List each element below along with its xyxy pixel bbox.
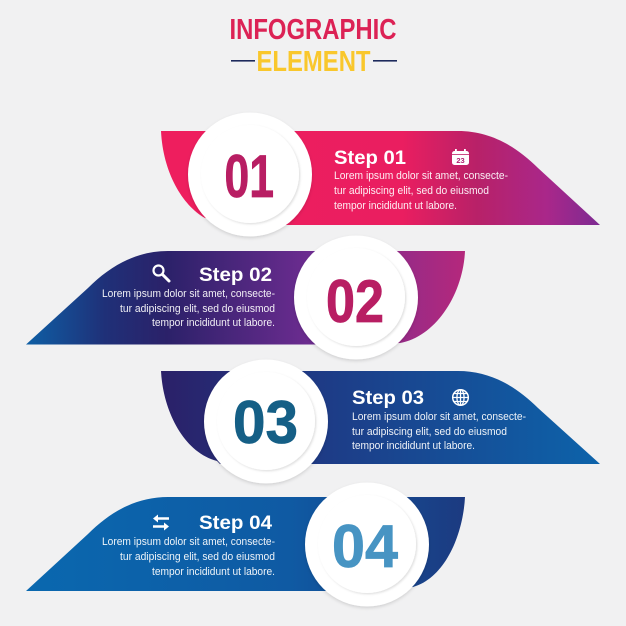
number circle 01	[188, 112, 312, 236]
number circle 04	[305, 482, 429, 606]
step 03 body text: tur adipiscing elit, sed do eiusmod	[352, 426, 507, 438]
step 03 body text: Lorem ipsum dolor sit amet, consecte-	[352, 411, 526, 423]
number circle 03: 03	[233, 389, 298, 456]
step 01 heading: Step 01	[334, 148, 406, 169]
band 03	[161, 371, 600, 464]
step 04 body text: Lorem ipsum dolor sit amet, consecte-	[102, 536, 275, 548]
step 04 body text: tempor incididunt ut labore.	[152, 566, 275, 578]
band 04	[26, 497, 465, 591]
title rule right	[373, 60, 397, 62]
number circle 04: 04	[332, 513, 399, 580]
step 02 heading: Step 02	[199, 265, 272, 286]
number circle 03	[204, 360, 328, 484]
number circle 02	[294, 236, 418, 360]
band 01	[161, 131, 600, 225]
panel: step 02	[26, 236, 465, 360]
step 01 body text: Lorem ipsum dolor sit amet, consecte-	[334, 170, 508, 182]
step 04 body text: tur adipiscing elit, sed do eiusmod	[120, 551, 275, 563]
step 02 body text: tur adipiscing elit, sed do eiusmod	[120, 303, 275, 315]
number circle 01: 01	[224, 143, 274, 210]
number circle 02: 02	[326, 268, 384, 335]
panel: step 04	[26, 482, 465, 606]
step 03 body text: tempor incididunt ut labore.	[352, 440, 475, 452]
step 03 heading: Step 03	[352, 388, 424, 409]
step 02 body text: Lorem ipsum dolor sit amet, consecte-	[102, 288, 275, 300]
step 01 body text: tempor incididunt ut labore.	[334, 200, 457, 212]
title rule left	[231, 60, 255, 62]
icon: calendar	[452, 149, 469, 165]
panel: step 01	[161, 112, 600, 236]
step 01 body text: tur adipiscing elit, sed do eiusmod	[334, 185, 489, 197]
heading: element: ELEMENT	[256, 46, 371, 78]
panel: step 03	[161, 360, 600, 484]
band 02	[26, 251, 465, 344]
icon: globe	[453, 390, 468, 405]
step 02 body text: tempor incididunt ut labore.	[152, 317, 275, 329]
heading: infographic: INFOGRAPHIC	[230, 14, 397, 46]
icon: magnifying glass	[154, 266, 169, 281]
icon: calendar: 23	[456, 156, 465, 165]
title	[230, 14, 397, 78]
step 04 heading: Step 04	[199, 513, 272, 534]
icon: swap arrows	[153, 514, 169, 530]
